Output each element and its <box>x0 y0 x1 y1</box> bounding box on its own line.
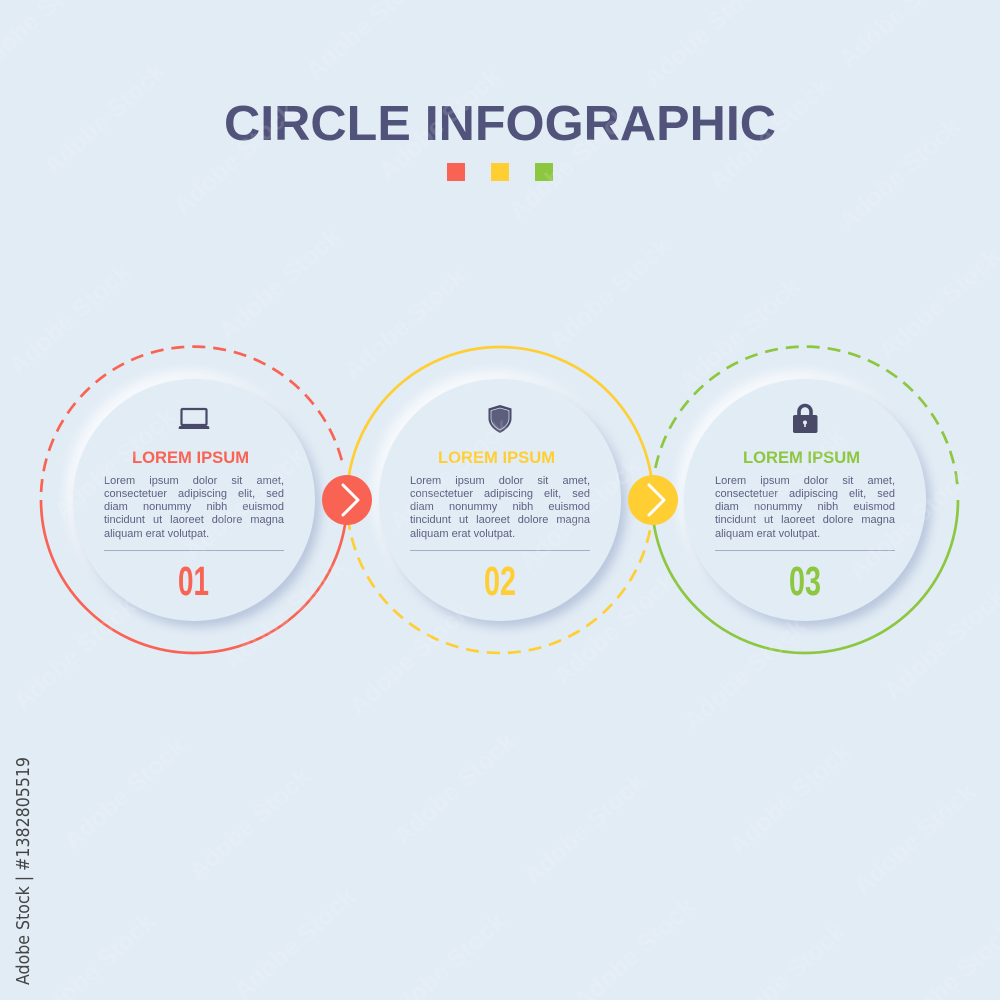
text: Adobe Stock <box>544 232 676 356</box>
text: Adobe Stock <box>49 402 181 526</box>
text: Adobe Stock <box>504 102 636 226</box>
body text: Lorem ipsum dolor sit amet, <box>410 475 590 487</box>
text: Adobe Stock <box>844 462 976 586</box>
ring: red dashed top and solid bottom <box>40 345 346 654</box>
body text: tincidunt ut laoreet dolore magna <box>104 514 284 526</box>
text: Adobe Stock <box>674 272 806 396</box>
body text: aliquam erat volutpat. <box>104 528 209 540</box>
text: Adobe Stock <box>384 412 516 536</box>
text: Adobe Stock <box>4 257 136 381</box>
text: Adobe Stock <box>849 777 981 901</box>
text: Adobe Stock <box>214 222 346 346</box>
icon: padlock <box>793 404 818 433</box>
body text: diam nonummy nibh euismod <box>410 501 590 513</box>
number 03: 03 <box>789 558 821 604</box>
body text: aliquam erat volutpat. <box>715 528 820 540</box>
text: Adobe Stock <box>344 597 476 721</box>
body text: aliquam erat volutpat. <box>410 528 515 540</box>
inner disc <box>73 379 315 621</box>
arrow: red connector <box>322 475 372 525</box>
body text: tincidunt ut laoreet dolore magna <box>715 514 895 526</box>
body text: Lorem ipsum dolor sit amet, <box>715 475 895 487</box>
text: Adobe Stock <box>39 57 171 181</box>
stock id label: Adobe Stock | #1382805519 <box>13 757 34 985</box>
text: Adobe Stock <box>519 767 651 891</box>
text: Adobe Stock <box>514 452 646 576</box>
inner disc <box>379 379 621 621</box>
text: Adobe Stock <box>9 592 141 716</box>
inner disc <box>684 379 926 621</box>
title: CIRCLE INFOGRAPHIC <box>224 97 776 151</box>
panel: step 03 <box>652 345 960 654</box>
body text: consectetuer adipiscing elit, sed <box>410 488 590 500</box>
text: Adobe Stock <box>724 737 856 861</box>
heading: LOREM IPSUM <box>743 448 860 467</box>
heading: LOREM IPSUM <box>132 448 249 467</box>
body text: consectetuer adipiscing elit, sed <box>104 488 284 500</box>
icon: shield <box>488 405 512 433</box>
body text <box>410 475 590 540</box>
body text: tincidunt ut laoreet dolore magna <box>410 514 590 526</box>
icon: laptop <box>178 408 210 429</box>
panel: step 01 <box>40 345 346 654</box>
ring: green dashed top and solid bottom <box>652 345 960 654</box>
heading: LOREM IPSUM <box>438 448 555 467</box>
text: Adobe Stock <box>389 727 521 851</box>
body text <box>715 475 895 540</box>
text: Adobe Stock <box>219 552 351 676</box>
body text <box>104 475 284 540</box>
panel: step 02 <box>348 346 652 654</box>
text: Adobe Stock <box>704 72 836 196</box>
divider <box>104 550 284 551</box>
text: Adobe Stock <box>184 762 316 886</box>
text: Adobe Stock <box>549 567 681 691</box>
divider <box>410 550 590 551</box>
ring: yellow solid top and dashed bottom <box>348 346 652 654</box>
body text: consectetuer adipiscing elit, sed <box>715 488 895 500</box>
text: Adobe Stock <box>169 97 301 221</box>
text: Adobe Stock <box>59 732 191 856</box>
body text: diam nonummy nibh euismod <box>715 501 895 513</box>
number 02: 02 <box>484 558 516 604</box>
number 01: 01 <box>178 558 209 604</box>
text: Adobe Stock <box>339 262 471 386</box>
text: Adobe Stock <box>374 62 506 186</box>
body text: Lorem ipsum dolor sit amet, <box>104 475 284 487</box>
divider <box>715 550 895 551</box>
text: Adobe Stock <box>719 422 851 546</box>
body text: diam nonummy nibh euismod <box>104 501 284 513</box>
text: Adobe Stock <box>179 442 311 566</box>
colour squares under title <box>447 163 553 181</box>
text: Adobe Stock <box>679 612 811 736</box>
text: Adobe Stock <box>834 112 966 236</box>
arrow: yellow connector <box>628 475 678 525</box>
